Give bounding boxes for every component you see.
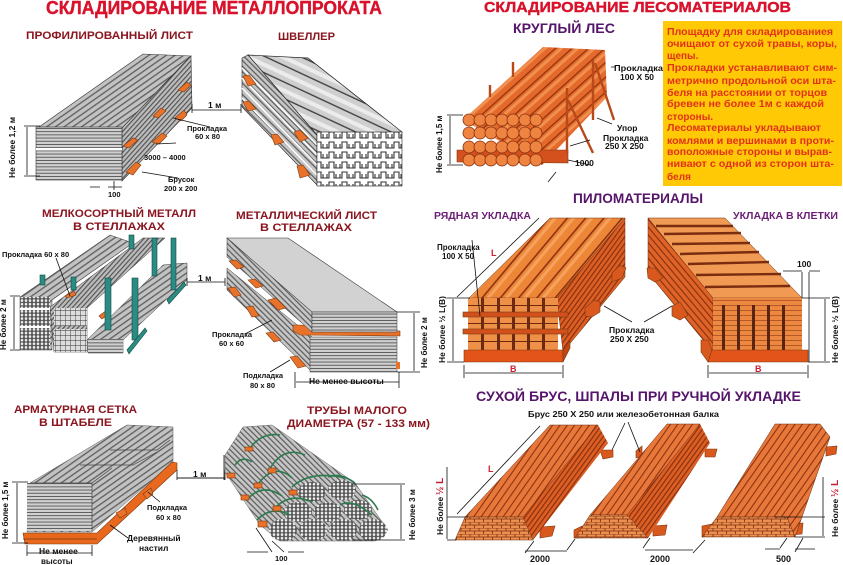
dimensions: Прокладка [212, 330, 253, 339]
callout: yellow text box: Лесоматериалы укладывают [667, 123, 821, 134]
sheet stack [227, 238, 400, 372]
dimensions: B [755, 364, 762, 374]
heading: В СТЕЛЛАЖАХ [73, 221, 166, 233]
callout: yellow text box: Прокладки устанавливают сим- [667, 63, 837, 74]
callout: yellow text box: бревен не более 1м с каждой [667, 98, 824, 110]
callout: yellow text box: нивают с одной из сторон шта- [667, 159, 834, 170]
heading: МЕТАЛЛИЧЕСКИЙ ЛИСТ [236, 209, 377, 222]
dimensions: ½ L [830, 480, 841, 497]
dimensions: Прокладка 60 х 80 [2, 250, 69, 259]
heading [42, 207, 196, 233]
pipe stack [225, 425, 388, 541]
dimensions: 1000 [575, 158, 594, 168]
dimensions: Не более ½ L(B) [437, 296, 447, 363]
panel: dry beams and sleepers [435, 387, 841, 564]
heading [236, 209, 377, 234]
dimensions: Подкладка [147, 503, 188, 512]
dimensions: L [491, 248, 497, 258]
callout: yellow text box: беля на расстоянии от торцов [667, 87, 827, 99]
heading: lumber: ПИЛОМАТЕРИАЛЫ [573, 190, 703, 206]
dimensions: Подкладка [243, 371, 284, 380]
dimensions: Прокладка [187, 124, 228, 133]
panel: profiled sheet [7, 29, 228, 199]
dimensions [0, 250, 225, 350]
callout: yellow text box: очищают от сухой травы, коры, [667, 39, 837, 50]
dimensions [177, 455, 417, 563]
dimensions: ½ L [435, 478, 446, 495]
callout: yellow text box [663, 21, 842, 186]
dimensions: настил [139, 543, 168, 553]
dimensions: 200 х 200 [164, 184, 197, 193]
heading: РЯДНАЯ УКЛАДКА [434, 211, 531, 222]
dimensions: Не более 1,5 м [435, 115, 444, 173]
dimensions: 500 [776, 554, 791, 564]
dimensions: Прокладка [609, 325, 655, 335]
log stack [457, 47, 614, 166]
dimensions [437, 218, 672, 378]
note: Брус 250 Х 250 или железобетонная балка [528, 409, 719, 419]
dimensions: 250 Х 250 [605, 141, 644, 151]
dimensions: 100 Х 50 [442, 252, 475, 261]
dimensions: 2000 [530, 554, 550, 564]
dimensions: 80 х 80 [250, 381, 275, 390]
dimensions: B [510, 364, 517, 374]
dimensions [212, 312, 429, 390]
dimensions [7, 117, 228, 199]
panel: channel [242, 31, 402, 186]
dimensions: 250 Х 250 [610, 334, 649, 344]
panel: row stacking [434, 211, 672, 378]
dimensions [1, 469, 225, 565]
dimensions: 60 х 80 [156, 513, 181, 522]
heading [287, 405, 430, 430]
channel stack [242, 55, 402, 186]
callout: yellow text box: метрично продольной оси шта- [667, 76, 836, 87]
panel: round timber [435, 19, 663, 182]
dimensions: Упор [617, 123, 637, 133]
heading: В СТЕЛЛАЖАХ [260, 222, 353, 234]
panel: crib stacking [647, 211, 840, 378]
dimensions: Не более ½ L(B) [830, 296, 840, 363]
callout: yellow text box: Площадку для складированиея [667, 27, 833, 38]
stack 3 [702, 424, 837, 537]
panel: small section metal [0, 207, 225, 354]
dimensions: 2000 [650, 554, 670, 564]
callout: yellow text box: беля [667, 171, 691, 183]
dimensions: Деревянный [127, 533, 181, 543]
dimensions: 3000 – 4000 [144, 153, 186, 162]
dimensions: Не более 1,2 м [7, 117, 17, 178]
dimensions: Не более 1,5 м [1, 481, 10, 539]
heading: ПРОФИЛИРОВАННЫЙ ЛИСТ [26, 29, 193, 42]
heading [14, 404, 137, 429]
heading: СУХОЙ БРУС, ШПАЛЫ ПРИ РУЧНОЙ УКЛАДКЕ [476, 387, 801, 404]
heading: АРМАТУРНАЯ СЕТКА [14, 404, 137, 416]
dimensions: 100 Х 50 [620, 72, 654, 82]
stack 1 [455, 425, 613, 540]
crib stack [647, 218, 808, 362]
heading: ДИАМЕТРА (57 - 133 мм) [287, 418, 430, 430]
callout: yellow text box: щепы. [667, 51, 699, 62]
dimensions: Не более 2 м [420, 317, 429, 368]
heading: УКЛАДКА В КЛЕТКИ [733, 211, 838, 222]
callout: yellow text box: комлями и вершинами в проти- [667, 136, 834, 147]
dimensions: Не более [435, 497, 445, 535]
dimensions: Брусок [168, 175, 195, 184]
dimensions: Не менее высоты [309, 376, 384, 386]
rack stack [20, 235, 187, 354]
dimensions: 1 м [198, 273, 211, 283]
callout: yellow text box: стороны. [667, 112, 713, 123]
dimensions: 1 м [193, 469, 206, 479]
dimensions: 100 [275, 554, 288, 563]
heading: В ШТАБЕЛЕ [39, 417, 112, 429]
heading: ШВЕЛЛЕР [278, 31, 335, 43]
profiled sheet stack [36, 54, 192, 181]
mesh stack on deck [23, 425, 177, 544]
heading: ТРУБЫ МАЛОГО [307, 405, 407, 417]
row stack [463, 218, 626, 362]
dimensions: Прокладка [437, 243, 480, 252]
dimensions [435, 422, 841, 564]
panel: small diameter pipes [177, 405, 430, 563]
stack 2 [574, 424, 717, 538]
heading: КРУГЛЫЙ ЛЕС [513, 19, 615, 36]
dimensions: 60 х 60 [219, 339, 244, 348]
gap 1 m, top [192, 100, 241, 113]
heading: МЕЛКОСОРТНЫЙ МЕТАЛЛ [42, 207, 196, 220]
dimensions: Не менее [39, 546, 78, 556]
dimensions: 100 [108, 190, 121, 199]
dimensions: Не более [830, 499, 840, 537]
callout: yellow text box: воположные стороны и вырав- [667, 147, 832, 158]
panel: metal sheet in racks [212, 209, 429, 390]
dimensions: Не более 3 м [408, 489, 417, 540]
panel: reinforcing mesh [1, 404, 225, 565]
dimensions: Прокладка [614, 63, 663, 73]
dimensions: 60 х 80 [195, 132, 220, 141]
dimensions: L [488, 464, 494, 474]
dimensions: Прокладка [603, 133, 649, 143]
dimensions [435, 63, 663, 182]
dimensions: 100 [797, 259, 811, 269]
dimensions [708, 259, 840, 378]
gap 1 m, top: 1 м [208, 100, 221, 110]
